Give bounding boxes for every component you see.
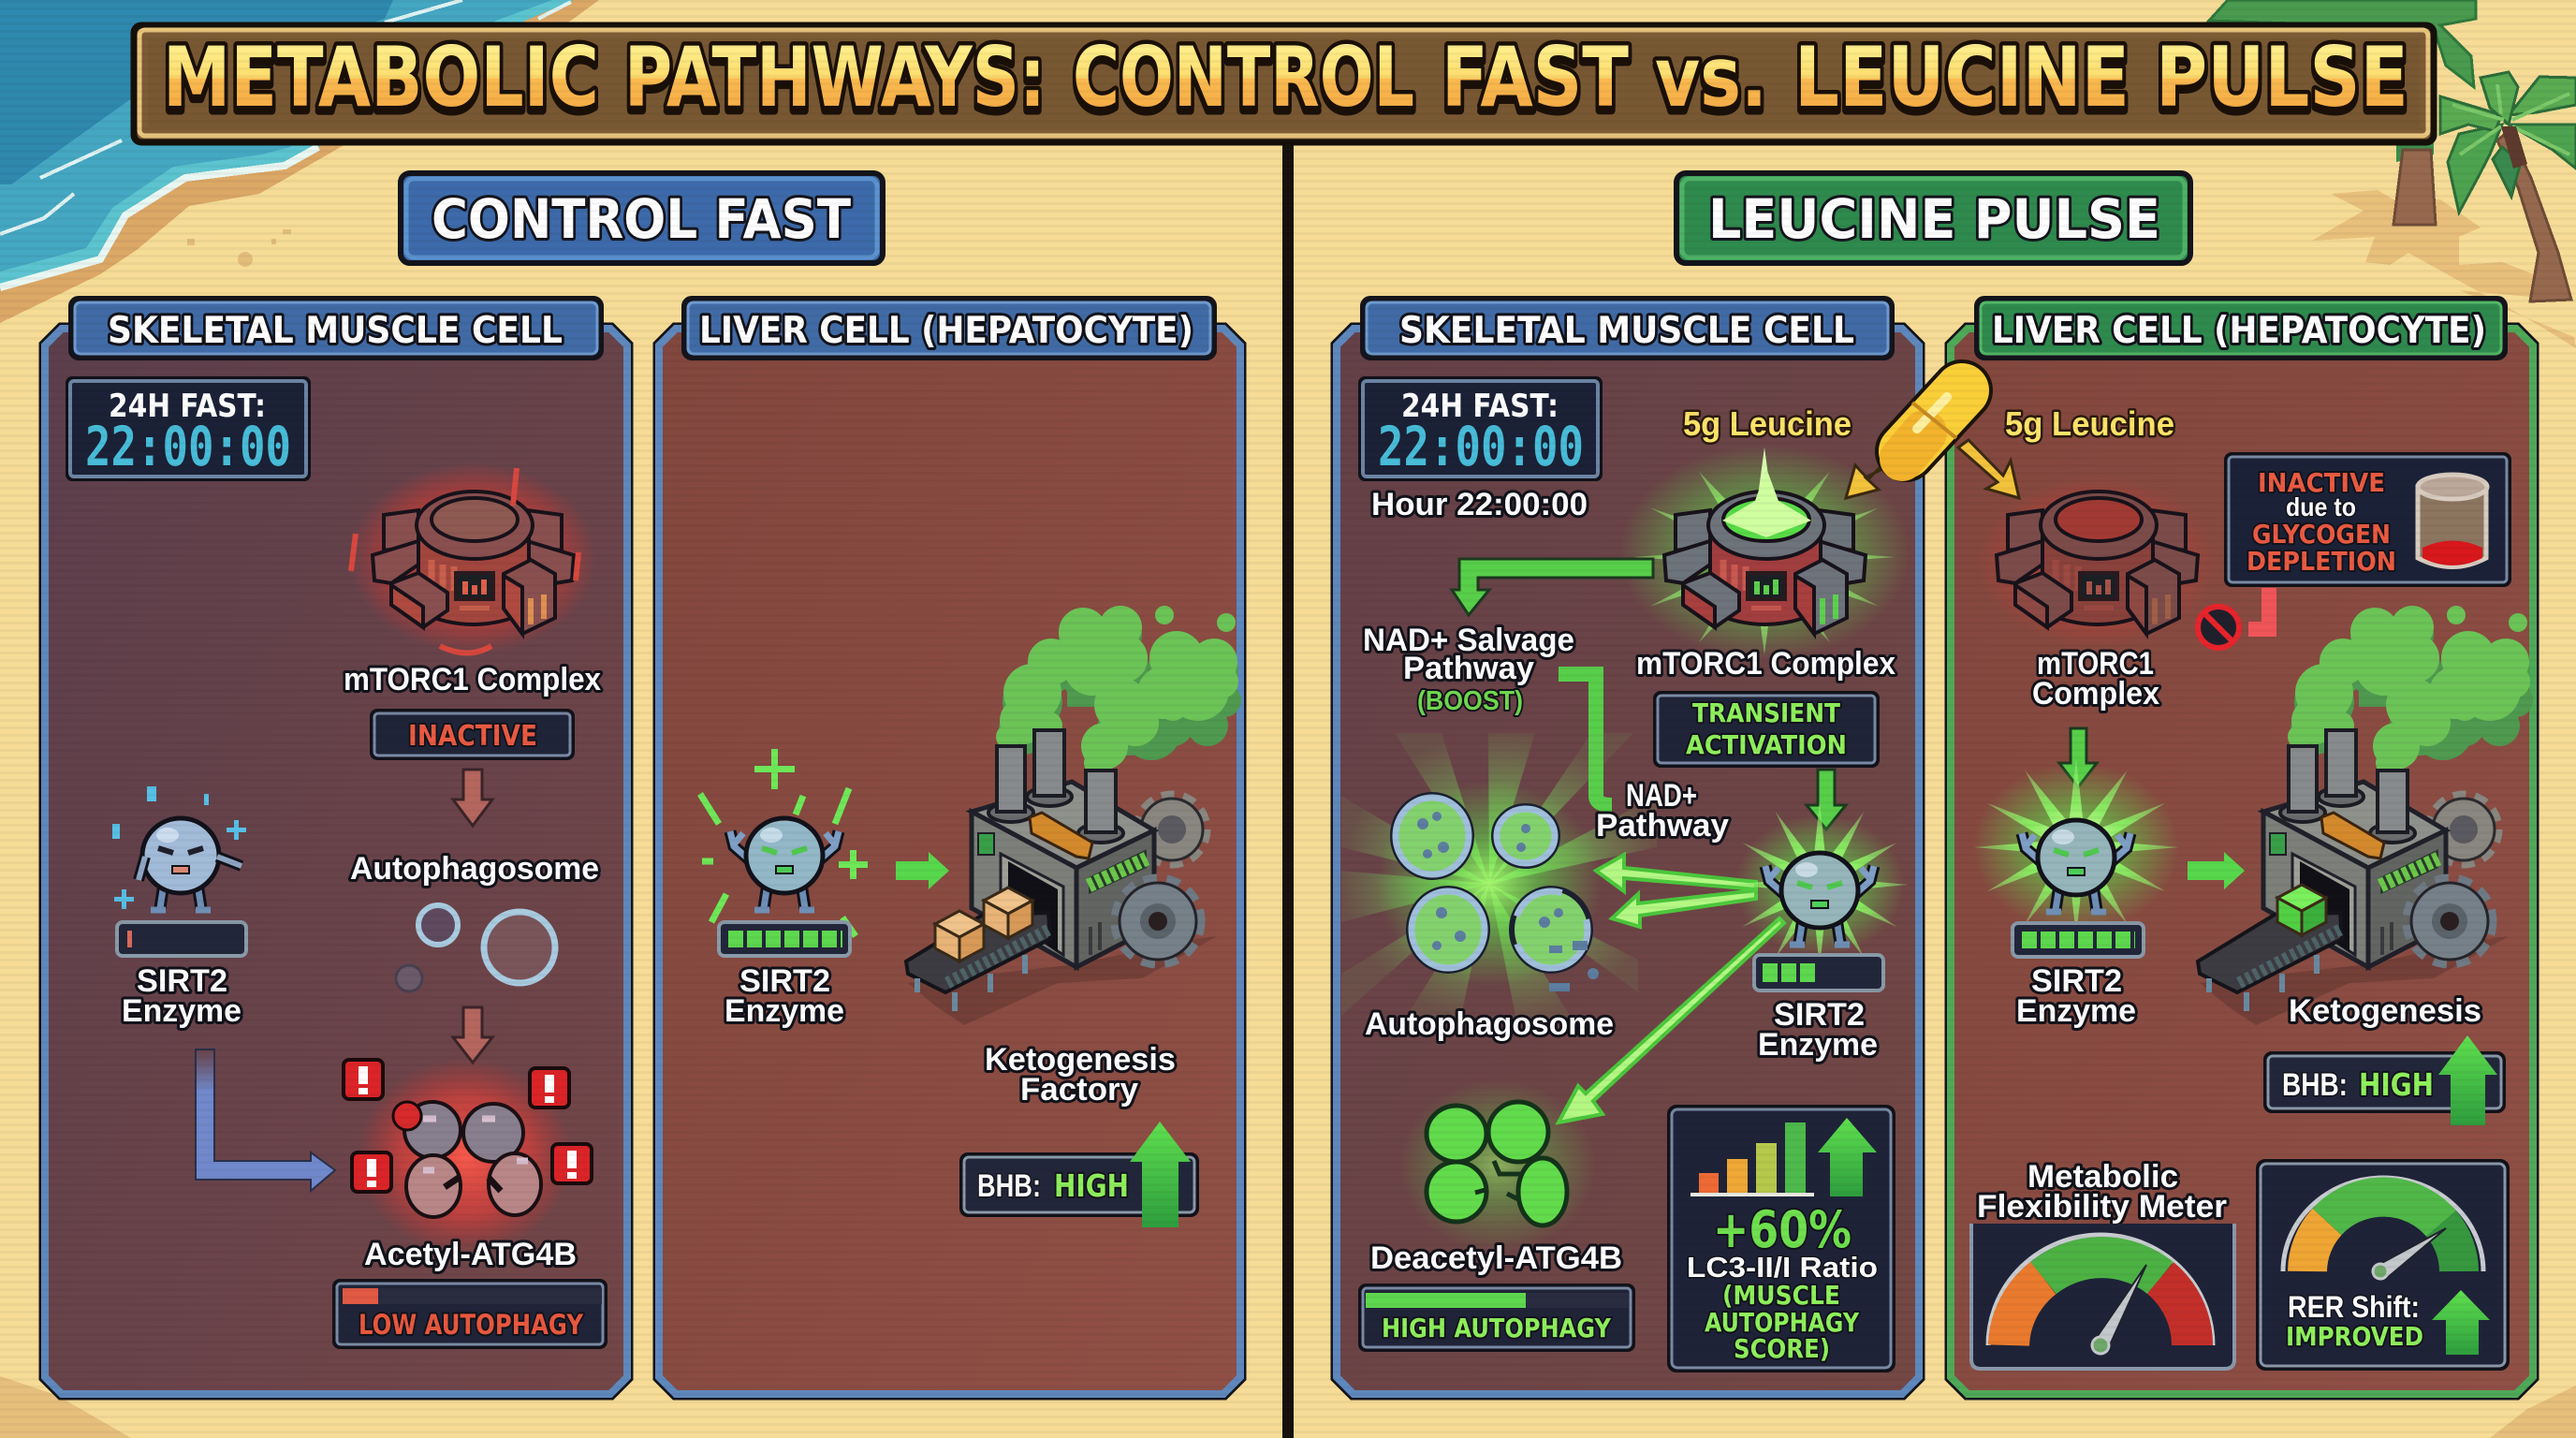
panel: leucine skeletal muscle cell bbox=[1333, 299, 1923, 1398]
arrow: SIRT2 to ketogenesis bbox=[2188, 852, 2245, 889]
arrow: mTORC1 to NAD+ salvage bbox=[1452, 559, 1653, 615]
icon: mTORC1 complex activated bbox=[1619, 445, 1910, 660]
label: muscle autophagy score: (MUSCLE bbox=[1722, 1280, 1840, 1311]
arrow: up bbox=[2432, 1290, 2490, 1355]
icon: SIRT2 enzyme energized bbox=[1731, 800, 1909, 969]
title text: FAST bbox=[1442, 29, 1629, 125]
status: transient activation: ACTIVATION bbox=[1686, 729, 1847, 760]
icon: depleted glycogen beaker bbox=[2418, 475, 2487, 567]
label: SIRT2 enzyme: Enzyme bbox=[724, 993, 844, 1029]
icon: prohibited sign bbox=[2198, 607, 2239, 648]
label: SIRT2 enzyme bbox=[2016, 963, 2136, 1029]
status: low autophagy bbox=[334, 1281, 606, 1347]
label: RER shift improved: IMPROVED bbox=[2286, 1321, 2423, 1352]
title text bbox=[163, 29, 2408, 125]
label: NAD+ salvage pathway (boost): (BOOST) bbox=[1417, 686, 1523, 716]
status: transient activation: TRANSIENT bbox=[1692, 697, 1840, 728]
timer: 22:00:00 bbox=[1378, 415, 1584, 478]
icon: autophagosome burst bbox=[1341, 733, 1657, 1020]
stat: +60%: +60% bbox=[1713, 1200, 1852, 1259]
icon: ketogenesis factory bbox=[2198, 606, 2533, 1025]
icon: SIRT2 enzyme energized bbox=[1973, 758, 2179, 936]
label: SIRT2 enzyme: SIRT2 bbox=[2031, 963, 2122, 999]
panel title bbox=[1977, 299, 2505, 358]
label: metabolic flexibility meter: Metabolic bbox=[2027, 1159, 2178, 1195]
label: ketogenesis: Ketogenesis bbox=[2289, 993, 2481, 1029]
label: mTORC1 complex: mTORC1 Complex bbox=[344, 662, 601, 697]
label: NAD+ pathway bbox=[1596, 778, 1729, 844]
title text: PATHWAYS: bbox=[624, 29, 1046, 125]
icon: acetyl-ATG4B bbox=[344, 1058, 592, 1255]
label: SIRT2 enzyme: Enzyme bbox=[2016, 993, 2136, 1029]
title text: vs. bbox=[1655, 29, 1767, 125]
title text: PULSE bbox=[2156, 29, 2408, 125]
panel: control liver cell bbox=[655, 299, 1244, 1398]
heading: Leucine Pulse: LEUCINE PULSE bbox=[1708, 187, 2160, 251]
label: RER shift improved: RER Shift: bbox=[2288, 1290, 2420, 1324]
status: inactive bbox=[372, 711, 573, 758]
meter: SIRT2 activity full bbox=[719, 922, 850, 956]
label: muscle autophagy score bbox=[1705, 1280, 1860, 1364]
label: muscle autophagy score: SCORE) bbox=[1734, 1333, 1830, 1364]
label: 5g leucine: 5g Leucine bbox=[2005, 404, 2174, 443]
timer: 22:00:00 bbox=[85, 415, 291, 478]
heading: Control Fast bbox=[401, 173, 883, 263]
label: mTORC1 complex: mTORC1 bbox=[2037, 646, 2154, 682]
ocean and shoreline bbox=[0, 0, 599, 323]
front palm bbox=[2440, 72, 2576, 301]
arrow: SIRT2 to acetyl-ATG4B bbox=[196, 1049, 335, 1191]
callout: inactive due to glycogen depletion: INACTIVE bbox=[2258, 467, 2385, 498]
label: SIRT2 enzyme bbox=[122, 963, 242, 1029]
palm shadows bbox=[2312, 190, 2576, 348]
label: SIRT2 enzyme: SIRT2 bbox=[1774, 997, 1865, 1033]
timer bbox=[67, 378, 309, 479]
bar chart bbox=[1690, 1123, 1814, 1196]
status: BHB high bbox=[961, 1122, 1197, 1227]
label: 5g leucine: 5g Leucine bbox=[1683, 404, 1852, 443]
palm trees bbox=[2209, 0, 2576, 348]
panel title bbox=[1363, 299, 1892, 358]
panel: LC3-II/I ratio score bbox=[1669, 1107, 1894, 1371]
status: BHB high: HIGH bbox=[2359, 1066, 2434, 1103]
timer bbox=[1360, 378, 1601, 479]
label: metabolic flexibility meter bbox=[1977, 1159, 2227, 1225]
label: RER shift improved bbox=[2286, 1290, 2423, 1352]
status: BHB high bbox=[2265, 1035, 2504, 1125]
arrow: down to acetyl-ATG4B bbox=[453, 1007, 492, 1063]
label: acetyl-ATG4B: Acetyl-ATG4B bbox=[364, 1237, 577, 1272]
label: SIRT2 enzyme: SIRT2 bbox=[137, 963, 227, 999]
label: ketogenesis factory bbox=[985, 1042, 1176, 1108]
timer: 24H FAST: bbox=[109, 388, 266, 425]
label: ketogenesis factory: Factory bbox=[1020, 1072, 1138, 1108]
center divider bbox=[1282, 140, 1294, 1438]
status: BHB high: BHB: bbox=[2282, 1067, 2348, 1103]
label: SIRT2 enzyme bbox=[724, 963, 844, 1029]
label: muscle autophagy score: AUTOPHAGY bbox=[1705, 1307, 1860, 1338]
gauge: metabolic flexibility meter bbox=[1971, 1224, 2234, 1369]
label: autophagosome: Autophagosome bbox=[1365, 1006, 1614, 1042]
label: SIRT2 enzyme: Enzyme bbox=[122, 993, 242, 1029]
label: mTORC1 complex: mTORC1 Complex bbox=[1636, 646, 1895, 682]
panel title: LIVER CELL (HEPATOCYTE) bbox=[699, 310, 1193, 352]
arrow: down to autophagosome bbox=[453, 770, 492, 826]
icon: ketogenesis factory bbox=[906, 606, 1241, 1025]
arrow: up bbox=[1818, 1118, 1877, 1196]
callout: inactive due to glycogen depletion bbox=[2226, 454, 2510, 585]
label: NAD+ salvage pathway (boost) bbox=[1363, 623, 1574, 716]
status: transient activation bbox=[1655, 693, 1878, 766]
panel: control skeletal muscle cell bbox=[41, 299, 631, 1398]
icon: small autophagosomes bbox=[396, 905, 555, 991]
status: BHB high: BHB: bbox=[977, 1168, 1041, 1204]
status: inactive: INACTIVE bbox=[408, 720, 537, 753]
panel title: SKELETAL MUSCLE CELL bbox=[1399, 310, 1854, 352]
arrow: NAD+ salvage to NAD+ pathway bbox=[1559, 674, 1612, 805]
title text: METABOLIC bbox=[163, 29, 599, 125]
meter: SIRT2 activity partial bbox=[1754, 955, 1883, 990]
icon: mTORC1 complex inactive bbox=[349, 462, 596, 653]
arrows: leucine capsule to cells bbox=[1846, 440, 2019, 498]
panel: leucine liver cell bbox=[1947, 299, 2537, 1398]
label: hour: Hour 22:00:00 bbox=[1371, 487, 1588, 522]
callout: inactive due to glycogen depletion: GLYCOGEN bbox=[2252, 519, 2391, 550]
title text: CONTROL bbox=[1073, 29, 1414, 125]
icon: SIRT2 enzyme resting bbox=[112, 786, 246, 910]
arrow: SIRT2 to ketogenesis bbox=[896, 852, 949, 889]
arrow: down to SIRT2 bbox=[2059, 728, 2097, 787]
label: mTORC1 complex bbox=[2032, 646, 2159, 712]
label: SIRT2 enzyme: SIRT2 bbox=[739, 963, 830, 999]
rear palm bbox=[2209, 0, 2476, 225]
icon: leucine capsule bbox=[1902, 390, 1962, 459]
panel title: SKELETAL MUSCLE CELL bbox=[108, 310, 563, 352]
label: SIRT2 enzyme bbox=[1758, 997, 1878, 1063]
callout: inactive due to glycogen depletion: DEPLETION bbox=[2247, 546, 2396, 577]
panel title bbox=[684, 299, 1214, 358]
label: NAD+ pathway: NAD+ bbox=[1626, 778, 1697, 814]
heading: Control Fast: CONTROL FAST bbox=[432, 187, 851, 251]
icon: mTORC1 complex inactive bbox=[1977, 476, 2217, 648]
status: high autophagy bbox=[1360, 1285, 1633, 1350]
label: mTORC1 complex: Complex bbox=[2032, 676, 2159, 712]
panel title bbox=[71, 299, 601, 358]
status: BHB high: HIGH bbox=[1054, 1167, 1129, 1204]
label: autophagosome: Autophagosome bbox=[350, 851, 599, 887]
title banner bbox=[134, 25, 2434, 142]
status: low autophagy: LOW AUTOPHAGY bbox=[359, 1309, 584, 1341]
label: NAD+ salvage pathway (boost): NAD+ Salvage bbox=[1363, 623, 1574, 658]
arrow: transient activation to SIRT2 bbox=[1807, 770, 1846, 829]
label: metabolic flexibility meter: Flexibility Meter bbox=[1977, 1189, 2227, 1225]
title text: LEUCINE bbox=[1794, 29, 2130, 125]
meter: SIRT2 activity low bbox=[117, 922, 246, 956]
status: high autophagy: HIGH AUTOPHAGY bbox=[1382, 1313, 1612, 1343]
label: deacetyl-ATG4B: Deacetyl-ATG4B bbox=[1370, 1240, 1622, 1276]
label: SIRT2 enzyme: Enzyme bbox=[1758, 1027, 1878, 1063]
timer: 24H FAST: bbox=[1401, 388, 1559, 425]
arrows: SIRT2 to autophagosomes and ATG4B bbox=[1559, 855, 1784, 1123]
callout: inactive due to glycogen depletion: due to bbox=[2286, 492, 2356, 521]
heading: Leucine Pulse bbox=[1676, 173, 2190, 263]
icon: SIRT2 enzyme active bbox=[700, 749, 868, 936]
panel title: LIVER CELL (HEPATOCYTE) bbox=[1992, 310, 2486, 352]
label: LC3-II/I ratio: LC3-II/I Ratio bbox=[1687, 1251, 1878, 1284]
label: NAD+ salvage pathway (boost): Pathway bbox=[1403, 651, 1534, 686]
label: ketogenesis factory: Ketogenesis bbox=[985, 1042, 1176, 1078]
arrow: inhibitor connector bbox=[2248, 588, 2269, 629]
label: NAD+ pathway: Pathway bbox=[1596, 808, 1729, 844]
icon: deacetyl-ATG4B bbox=[1399, 1079, 1596, 1252]
meter: SIRT2 activity full bbox=[2012, 923, 2144, 957]
gauge: RER shift bbox=[2258, 1161, 2508, 1369]
